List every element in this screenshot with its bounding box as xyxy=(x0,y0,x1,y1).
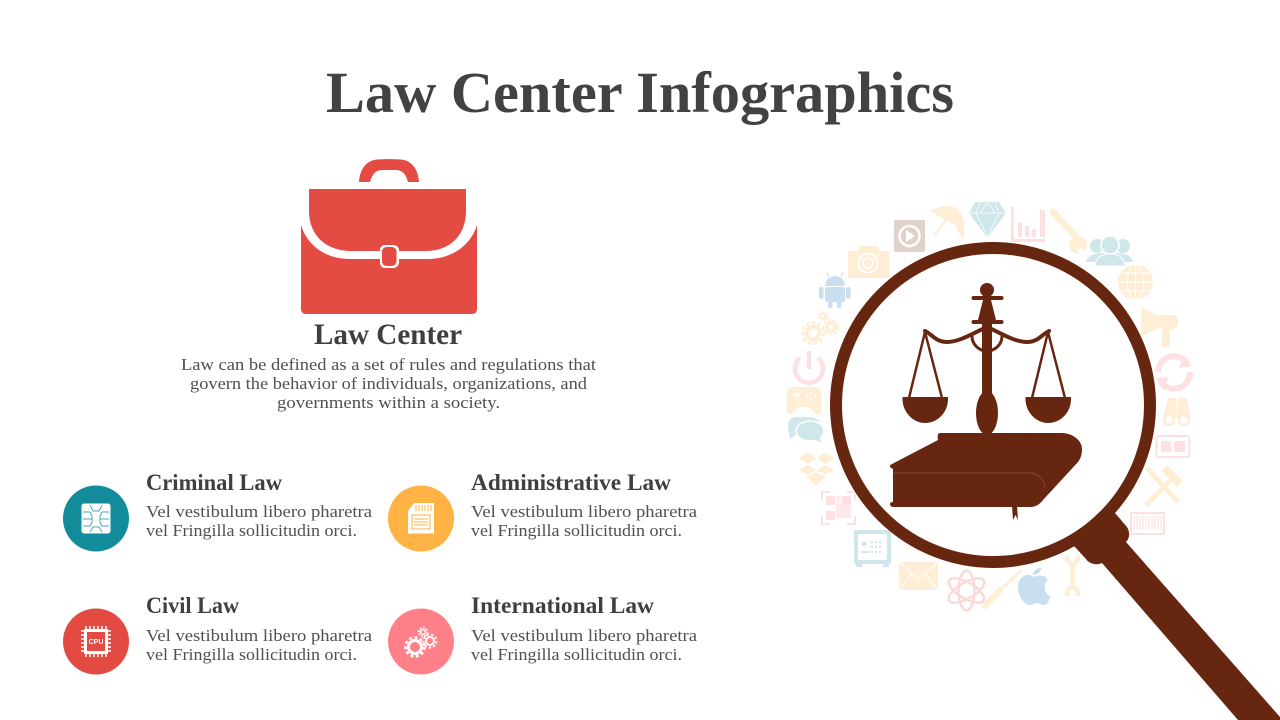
icon: apple xyxy=(1018,568,1050,605)
heading: administrative law: Administrative Law xyxy=(471,470,671,496)
icon: wrench xyxy=(1053,212,1087,254)
magnifying glass xyxy=(836,248,1280,720)
text block: administrative law: Vel vestibulum libero pharetra xyxy=(471,502,697,521)
icon: bar chart xyxy=(1011,207,1045,242)
text block: criminal law xyxy=(146,502,372,540)
icon: cpu: CPU xyxy=(89,639,103,646)
icon: screwdriver xyxy=(985,571,1021,606)
icon: cog group xyxy=(802,312,838,344)
panel: administrative law xyxy=(388,470,697,552)
icon: umbrella xyxy=(930,206,965,240)
text block: civil law xyxy=(146,626,372,664)
text block: civil law: vel Fringilla sollicitudin orci. xyxy=(146,645,357,664)
icon: megaphone xyxy=(1141,306,1178,347)
icon: gears xyxy=(388,608,454,674)
text block: law definition: governments within a society. xyxy=(277,393,500,412)
panel: law center intro xyxy=(181,159,596,412)
icon: camera xyxy=(848,246,889,278)
icon: safe xyxy=(854,530,891,567)
icon ring: pale technology icons xyxy=(787,202,1191,610)
text block: international law: vel Fringilla sollicitudin orci. xyxy=(471,645,682,664)
icon: gamepad xyxy=(787,387,821,415)
text block: international law xyxy=(471,626,697,664)
icon: people xyxy=(1086,236,1133,266)
icon: binoculars xyxy=(1163,398,1191,425)
icon: phone box xyxy=(1156,436,1190,457)
text block: administrative law: vel Fringilla sollicitudin orci. xyxy=(471,521,682,540)
icon: qr code xyxy=(821,491,856,525)
icon: envelope xyxy=(899,562,938,590)
icon: play tile xyxy=(894,220,925,252)
text block: law definition xyxy=(181,355,596,412)
magnifier lens xyxy=(836,248,1150,562)
icon: sd card xyxy=(388,486,454,552)
icon: sim chip xyxy=(63,486,129,552)
text block: law definition: Law can be defined as a set of rules and regulations that xyxy=(181,355,596,374)
icon: cpu xyxy=(63,608,129,674)
icon: refresh xyxy=(1156,356,1191,389)
title: Law Center Infographics xyxy=(326,60,954,125)
icon: barcode xyxy=(1131,513,1164,534)
icon: power xyxy=(795,351,823,383)
text block: criminal law: vel Fringilla sollicitudin orci. xyxy=(146,521,357,540)
icon: chat bubbles xyxy=(788,417,824,443)
icon: briefcase xyxy=(301,159,477,314)
icon: double wrench xyxy=(1067,555,1078,596)
heading: civil law: Civil Law xyxy=(146,593,239,619)
heading: law center: Law Center xyxy=(314,319,462,351)
icon: open box xyxy=(799,452,834,485)
panel: international law xyxy=(388,593,697,674)
icon: scales of justice on a book xyxy=(890,283,1082,520)
magnifier handle xyxy=(1074,513,1280,720)
icon: globe xyxy=(1118,264,1153,300)
icon: atom xyxy=(945,570,988,610)
text block: administrative law xyxy=(471,502,697,540)
heading: international law: International Law xyxy=(471,593,654,619)
text block: law definition: govern the behavior of individuals, organizations, and xyxy=(190,374,588,393)
icon: android xyxy=(819,272,850,308)
text block: civil law: Vel vestibulum libero pharetra xyxy=(146,626,372,645)
text block: criminal law: Vel vestibulum libero pharetra xyxy=(146,502,372,521)
panel: civil law xyxy=(63,593,372,674)
icon: diamond xyxy=(969,202,1006,238)
icon: hammer and wrench xyxy=(1146,468,1180,505)
panel: criminal law xyxy=(63,470,372,552)
heading: criminal law: Criminal Law xyxy=(146,470,282,496)
text block: international law: Vel vestibulum libero pharetra xyxy=(471,626,697,645)
